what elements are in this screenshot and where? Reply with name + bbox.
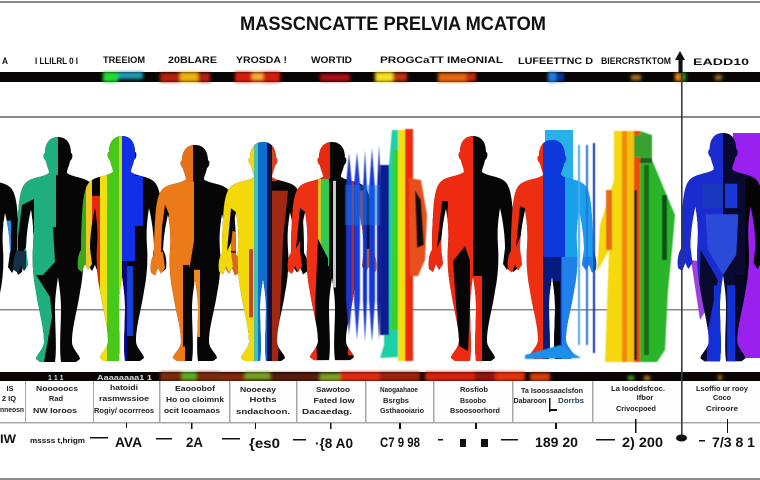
column headings: BIERCRSTKTOM bbox=[601, 56, 671, 67]
bottom colour bar: 1 1 1 bbox=[48, 375, 64, 382]
figure 2: rainbow striped body bbox=[78, 136, 166, 361]
description boxes bbox=[0, 381, 760, 424]
timeline values: 189 20 bbox=[535, 434, 578, 450]
description boxes: La Iooddsfcoc. bbox=[611, 384, 665, 393]
timeline values: C7 9 98 bbox=[380, 434, 420, 450]
column headings: WORTID bbox=[311, 55, 352, 66]
column headings: 20BLARE bbox=[168, 55, 217, 66]
description boxes: Naogaahaoe bbox=[380, 385, 418, 394]
figure 9: blue and black body with purple panel bbox=[672, 133, 760, 366]
figure 4: yellow and blue striped body bbox=[218, 142, 307, 362]
timeline values: IW bbox=[0, 432, 17, 446]
description boxes: Dacaedag. bbox=[302, 407, 352, 416]
description boxes: nneosn bbox=[0, 405, 24, 414]
timeline values: {es0 bbox=[249, 435, 280, 451]
bottom colour bar: Aaaaaaaa1 1 bbox=[97, 375, 152, 382]
description boxes: Bsoosoorhord bbox=[450, 406, 500, 415]
description boxes: Gsthaooiario bbox=[380, 406, 424, 415]
figure 7: red and blue body with cyan column bbox=[508, 130, 596, 360]
bottom colour bar bbox=[0, 372, 760, 382]
column headings: YROSDA ! bbox=[236, 55, 287, 66]
figure 3: orange and black body bbox=[150, 145, 238, 361]
timeline tick marks bbox=[90, 398, 728, 442]
description boxes: NW Ioroos bbox=[33, 406, 77, 415]
column headings: A bbox=[2, 56, 8, 67]
timeline values: AVA bbox=[115, 434, 142, 450]
description boxes: Coco bbox=[713, 393, 731, 402]
description boxes: Dabaroon bbox=[514, 396, 547, 405]
description boxes: Rogiy/ ocorrreos bbox=[94, 406, 154, 415]
title: MASSCNCATTE PRELVIA MCATOM bbox=[240, 14, 546, 35]
description boxes: Eaooobof bbox=[175, 384, 216, 393]
description boxes: IS bbox=[6, 384, 14, 393]
figure 5: red, green and black body bbox=[288, 142, 376, 360]
figure 1: green and black body bbox=[14, 137, 98, 362]
column headings: PROGCaTT IMeONIAL bbox=[380, 55, 503, 66]
spectral blue lines bbox=[345, 145, 381, 342]
description boxes: Dorrbs bbox=[558, 396, 584, 405]
description boxes: sndachoon. bbox=[236, 407, 290, 416]
column headings bbox=[2, 55, 749, 68]
description boxes: rasmwssioe bbox=[99, 394, 149, 403]
description boxes: Fated low bbox=[314, 396, 355, 405]
description boxes: Nooooocs bbox=[36, 384, 78, 393]
description boxes: Bsoobo bbox=[460, 396, 486, 405]
rainbow column bbox=[380, 129, 427, 361]
rainbow column with green figure bbox=[597, 131, 675, 362]
timeline values: 7/3 8 1 bbox=[712, 434, 755, 450]
column headings: TREEIOM bbox=[103, 55, 145, 66]
timeline values bbox=[0, 432, 755, 451]
description boxes: Lsoffio ur rooy bbox=[696, 384, 749, 393]
vertical arrow bbox=[675, 51, 687, 442]
description boxes: ocit Icoamaos bbox=[164, 406, 220, 415]
description boxes: Nooeeay bbox=[240, 385, 277, 394]
description boxes: 2 IQ bbox=[2, 394, 16, 403]
description boxes: Criroore bbox=[706, 404, 738, 413]
column headings: EADD10 bbox=[693, 57, 749, 68]
description boxes: Rad bbox=[49, 394, 64, 403]
description boxes: Ta Isoossaaclsfon bbox=[521, 386, 583, 395]
description boxes: Bsrgbs bbox=[383, 396, 409, 405]
description boxes: Rosfiob bbox=[460, 385, 488, 394]
timeline values: 2A bbox=[186, 434, 203, 450]
top colour bar bbox=[0, 72, 760, 82]
timeline values: ·{8 A0 bbox=[315, 435, 353, 451]
description boxes: Crivocpoed bbox=[616, 404, 656, 413]
description boxes: Sawotoo bbox=[316, 385, 350, 394]
description boxes: Ifbor bbox=[637, 393, 653, 402]
column headings: LUFEETTNC D bbox=[518, 56, 593, 67]
timeline values: mssss t,hrigm bbox=[30, 436, 85, 445]
description boxes: Hoths bbox=[250, 395, 276, 404]
column headings: I LLILRL 0 I bbox=[35, 56, 78, 67]
description boxes: hatoidi bbox=[110, 383, 138, 392]
description boxes: Ho oo cloimnk bbox=[166, 395, 225, 404]
figure 0: partial blue and black body bbox=[0, 182, 22, 294]
figure 6: red and black body bbox=[428, 136, 517, 361]
timeline values: 2) 200 bbox=[622, 434, 663, 450]
